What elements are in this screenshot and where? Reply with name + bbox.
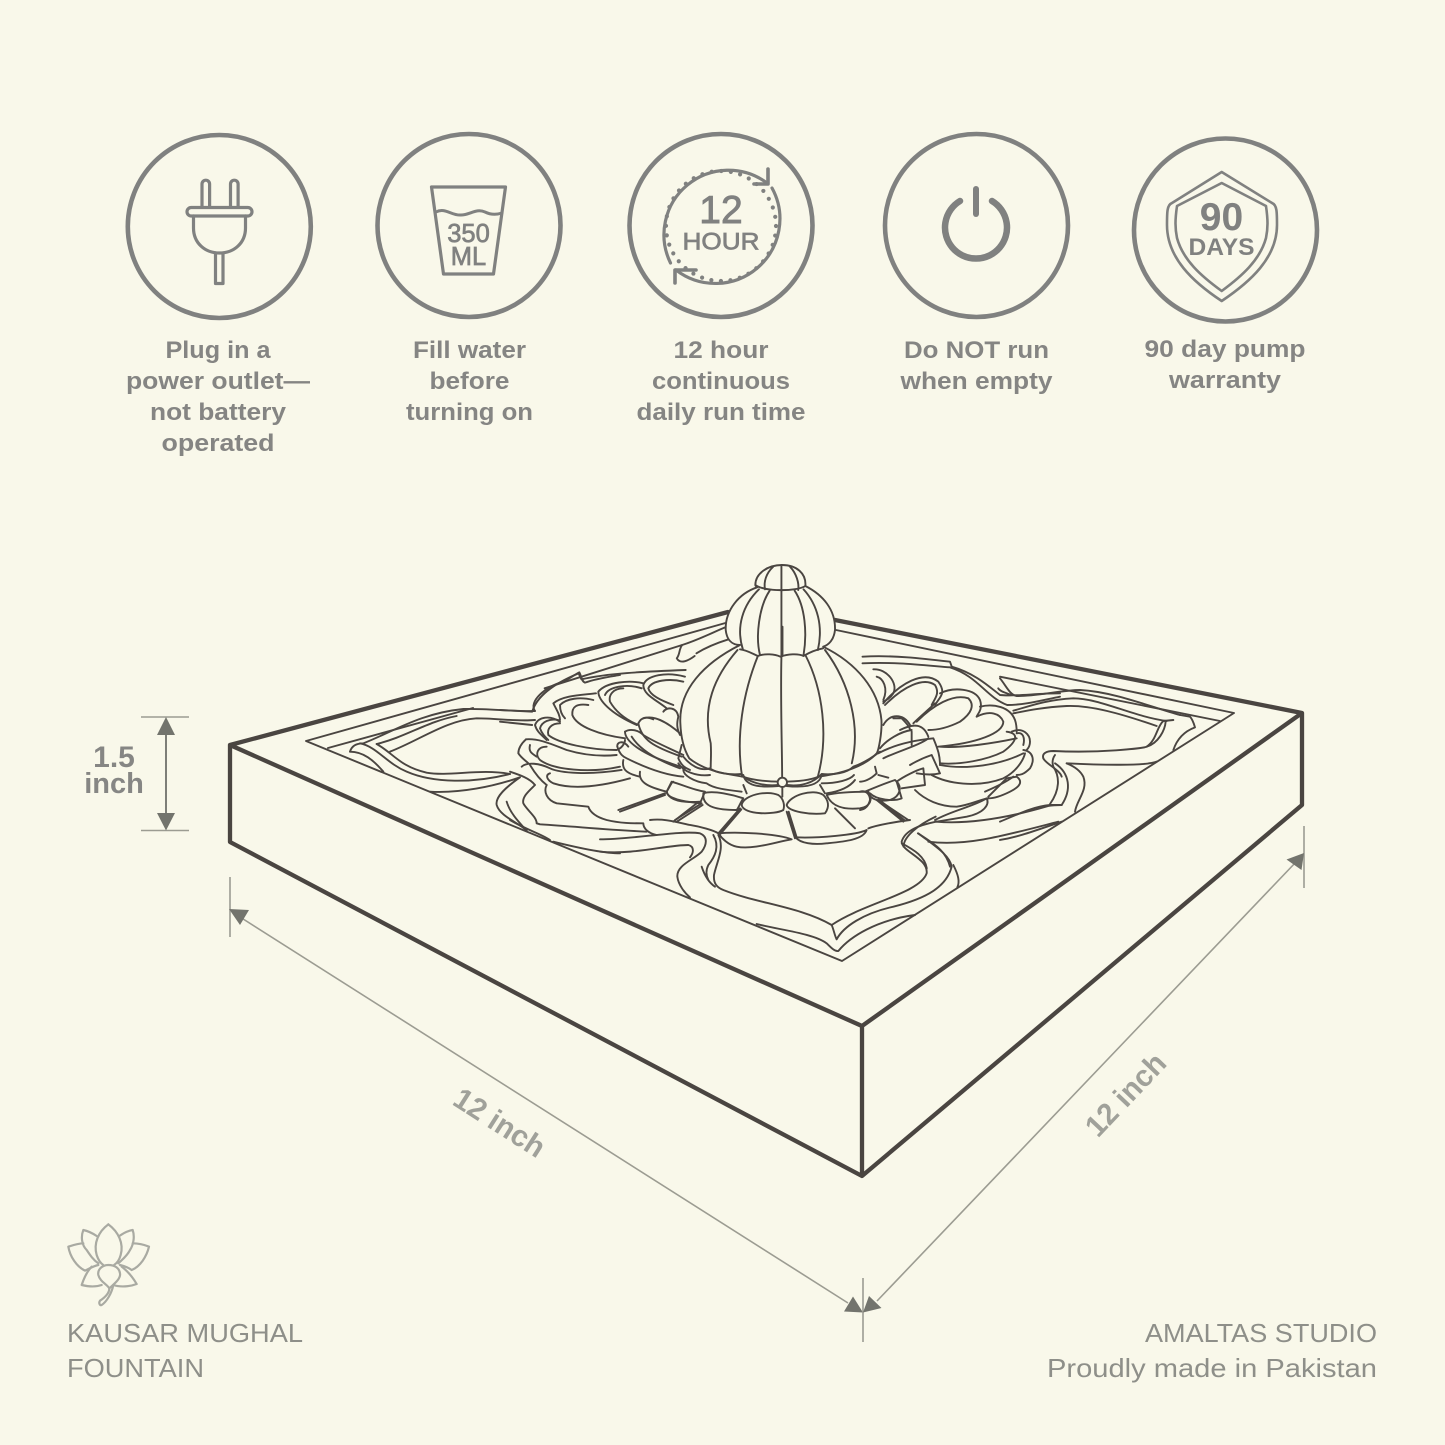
instruction: warranty [1134,138,1317,394]
icon: 12 hour clock: 12 [699,189,743,232]
dome base petals and front frills [650,752,910,847]
dimension: right width 12 inch: 12 inch [1079,1047,1173,1143]
label: 90 day warranty: 90 day pump [1144,336,1306,363]
label: plug in: not battery [150,399,286,426]
icon: power symbol [885,134,1068,317]
label: 12 hour: continuous [652,368,790,395]
label: do not run: Do NOT run [904,337,1049,364]
icon: 90 days shield [1134,138,1317,322]
instruction: do not run empty [885,134,1068,395]
icon: 12 hour clock [630,134,812,317]
instruction: 12 hour run time [630,134,812,426]
brand name: FOUNTAIN [67,1353,204,1383]
icon: glass of water 350 ml [378,134,560,317]
left lotus petals [510,674,700,840]
label: fill water: turning on [406,399,533,426]
label: fill water [406,337,533,426]
inner recessed frame [306,622,1234,961]
dimension: right width 12 inch [863,826,1304,1342]
icon: glass of water 350 ml: ML [451,243,486,271]
icon: power plug [128,135,311,318]
icon: 12 hour clock: HOUR [682,228,760,256]
dimension: height 1.5 inch [84,717,189,830]
instruction: fill water [378,134,560,426]
dimension: height 1.5 inch: inch [84,768,144,800]
label: do not run: when empty [899,368,1053,395]
instruction: plug in [126,135,311,457]
label: 90 day warranty: warranty [1168,367,1281,394]
carved border: front lobe [600,805,1062,951]
label: 12 hour: 12 hour [674,337,769,364]
dimension: height 1.5 inch: 1.5 [93,741,135,774]
label: fill water: before [430,368,510,395]
dimension: left width 12 inch [229,877,863,1312]
studio credit [1047,1318,1377,1383]
fountain dome [680,565,882,782]
label: fill water: Fill water [413,337,526,364]
icon: 12 hour clock: HOUR [682,228,760,256]
label: plug in: Plug in a [166,337,271,364]
icon: 90 days shield: 90 [1200,196,1243,239]
label: 12 hour [636,337,806,426]
right lotus petals [860,669,1033,822]
fountain drawing [230,565,1302,1176]
brand name: KAUSAR MUGHAL [67,1318,303,1348]
studio credit: Proudly made in Pakistan [1047,1353,1377,1383]
studio credit: AMALTAS STUDIO [1145,1318,1377,1348]
fountain base box [230,612,1302,1176]
label: plug in: power outlet— [126,368,311,395]
brand block: Kausar Mughal Fountain [67,1224,303,1383]
icon: 90 days shield: DAYS [1188,234,1254,261]
carved border: top curls [500,627,1060,868]
brand name [67,1318,303,1383]
label: 90 day warranty [1144,336,1306,394]
carved border: right lobe [1000,678,1195,840]
label: plug in: operated [162,430,274,457]
label: plug in [126,337,311,457]
label: 12 hour: daily run time [636,399,806,426]
dimension: left width 12 inch: 12 inch [447,1082,551,1165]
icon: glass of water 350 ml: 350 [447,220,490,248]
carved border: left lobe [350,672,620,853]
label: do not run [899,337,1053,395]
icon: lotus logo [68,1224,149,1305]
